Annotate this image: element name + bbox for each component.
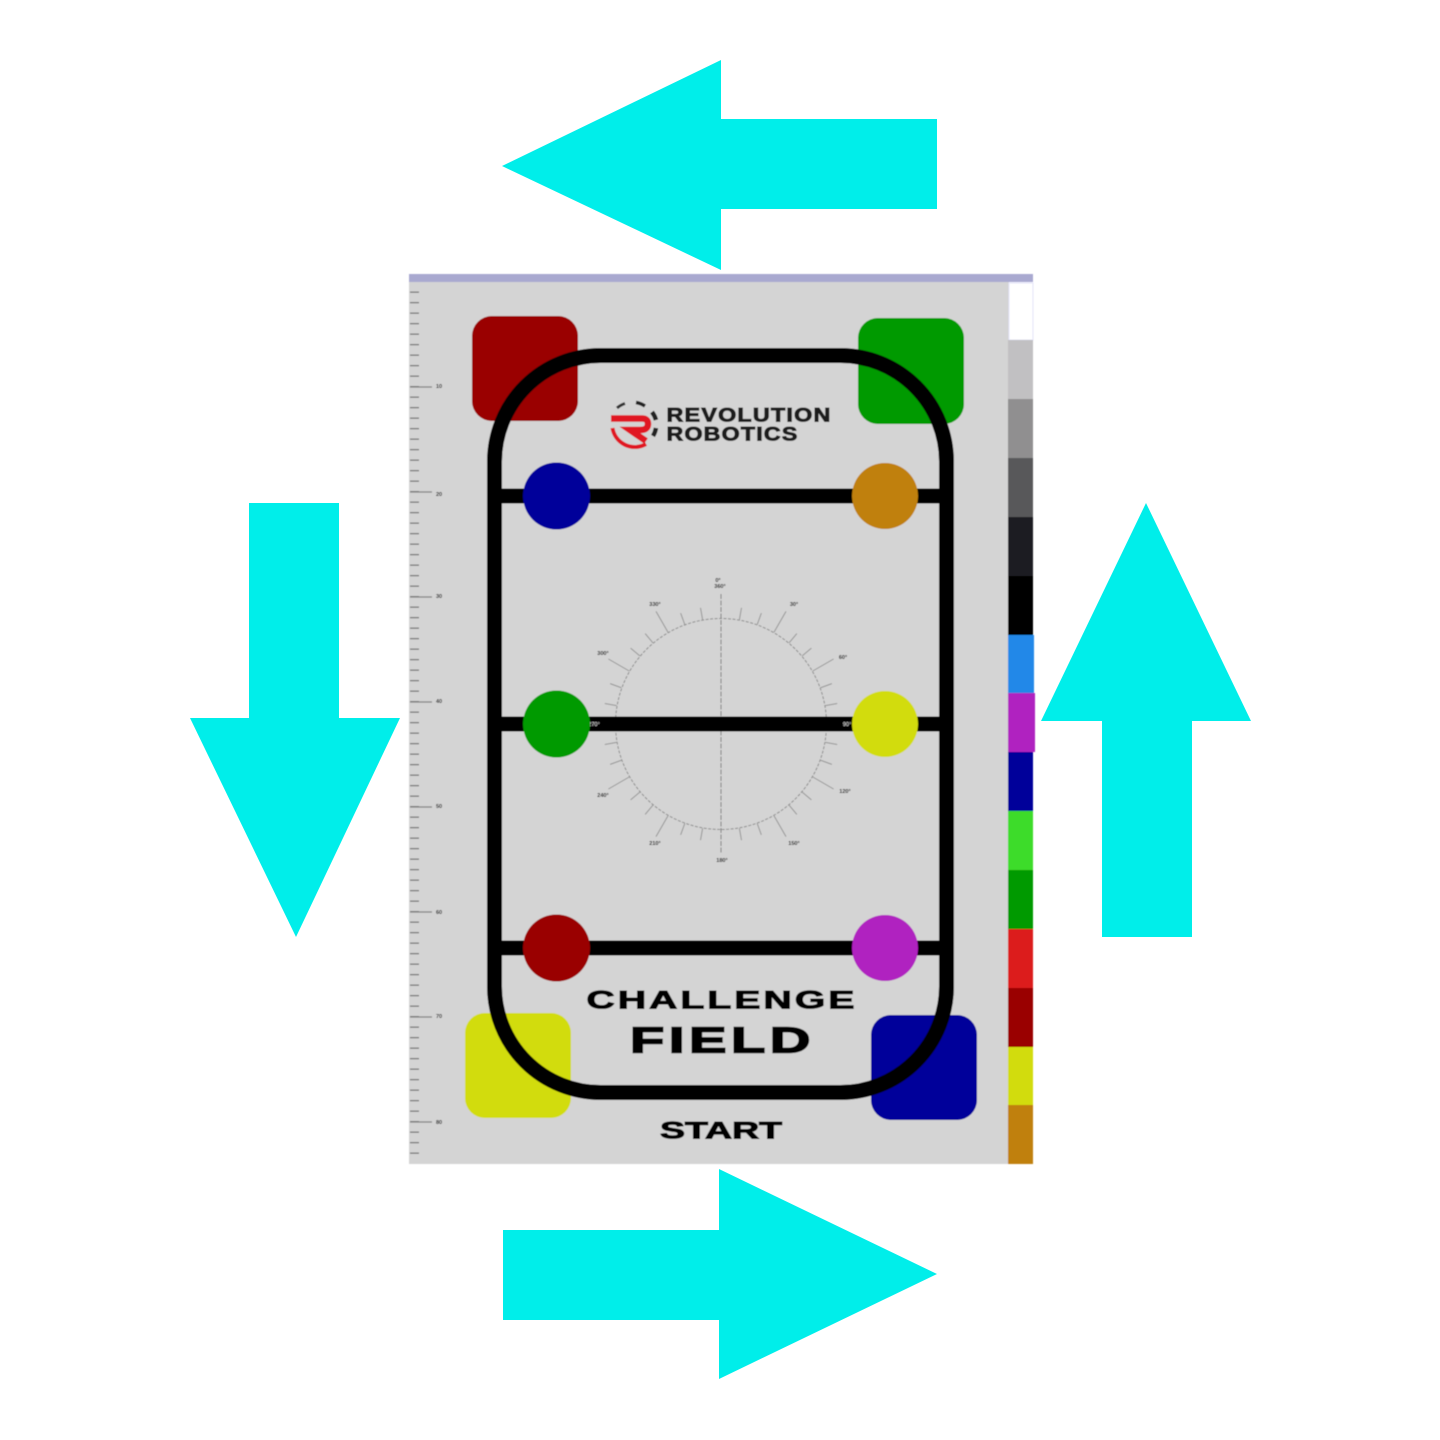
circle marker: purple bbox=[852, 915, 918, 981]
circle marker: blue bbox=[523, 462, 590, 530]
protractor dial: 30° bbox=[790, 602, 798, 608]
track loop and cross lines bbox=[494, 356, 946, 1092]
protractor dial: 150° bbox=[788, 841, 800, 847]
protractor dial: 120° bbox=[839, 789, 851, 795]
protractor dial: 60° bbox=[839, 655, 847, 661]
label: start: START bbox=[660, 1118, 783, 1144]
arrow: right pointing up bbox=[1041, 503, 1251, 937]
circle marker: green bbox=[523, 690, 590, 758]
protractor dial: 210° bbox=[649, 841, 661, 847]
protractor dial: 0° bbox=[715, 578, 721, 584]
corner square: yellow bbox=[465, 1013, 571, 1118]
arrow: bottom pointing right bbox=[503, 1169, 937, 1379]
ruler scale: 40 bbox=[436, 699, 442, 705]
protractor dial: 330° bbox=[649, 602, 661, 608]
corner square: blue bbox=[871, 1015, 977, 1120]
heading: field: FIELD bbox=[630, 1020, 815, 1060]
protractor dial: 240° bbox=[597, 793, 609, 799]
logo text: REVOLUTION bbox=[666, 406, 832, 426]
dial labels on bar: 90° bbox=[843, 722, 851, 728]
logo: Revolution Robotics bbox=[611, 402, 832, 447]
protractor dial: 300° bbox=[597, 651, 609, 657]
ruler scale: 60 bbox=[436, 910, 442, 916]
protractor dial: 180° bbox=[716, 858, 728, 864]
corner square: green bbox=[858, 318, 964, 424]
corner square: red bbox=[472, 316, 578, 421]
ruler scale: 30 bbox=[436, 594, 442, 600]
dial labels on bar: 270° bbox=[588, 722, 600, 728]
logo: Revolution Robotics: ROBOTICS bbox=[666, 424, 798, 446]
top band bbox=[409, 274, 1033, 282]
circle marker: dark red bbox=[523, 914, 590, 982]
circle marker: yellow bbox=[852, 691, 918, 757]
ruler scale: 70 bbox=[436, 1014, 442, 1020]
ruler scale: 80 bbox=[436, 1120, 442, 1126]
circle marker: orange bbox=[852, 463, 918, 529]
ruler scale: 10 bbox=[436, 384, 442, 390]
icon: logo ring and R bbox=[611, 402, 656, 447]
dial labels on bar bbox=[588, 722, 851, 728]
protractor dial bbox=[597, 578, 851, 864]
panel: challenge field bbox=[409, 274, 1035, 1164]
arrow: left pointing down bbox=[190, 503, 400, 937]
heading: challenge: CHALLENGE bbox=[586, 986, 858, 1014]
field background bbox=[409, 281, 1009, 1164]
colour calibration strip bbox=[1008, 283, 1035, 1164]
ruler scale: 50 bbox=[436, 804, 442, 810]
arrow: top pointing left bbox=[502, 60, 937, 270]
protractor dial: 360° bbox=[714, 584, 726, 590]
ruler scale bbox=[410, 292, 442, 1155]
ruler scale: 20 bbox=[436, 492, 442, 498]
